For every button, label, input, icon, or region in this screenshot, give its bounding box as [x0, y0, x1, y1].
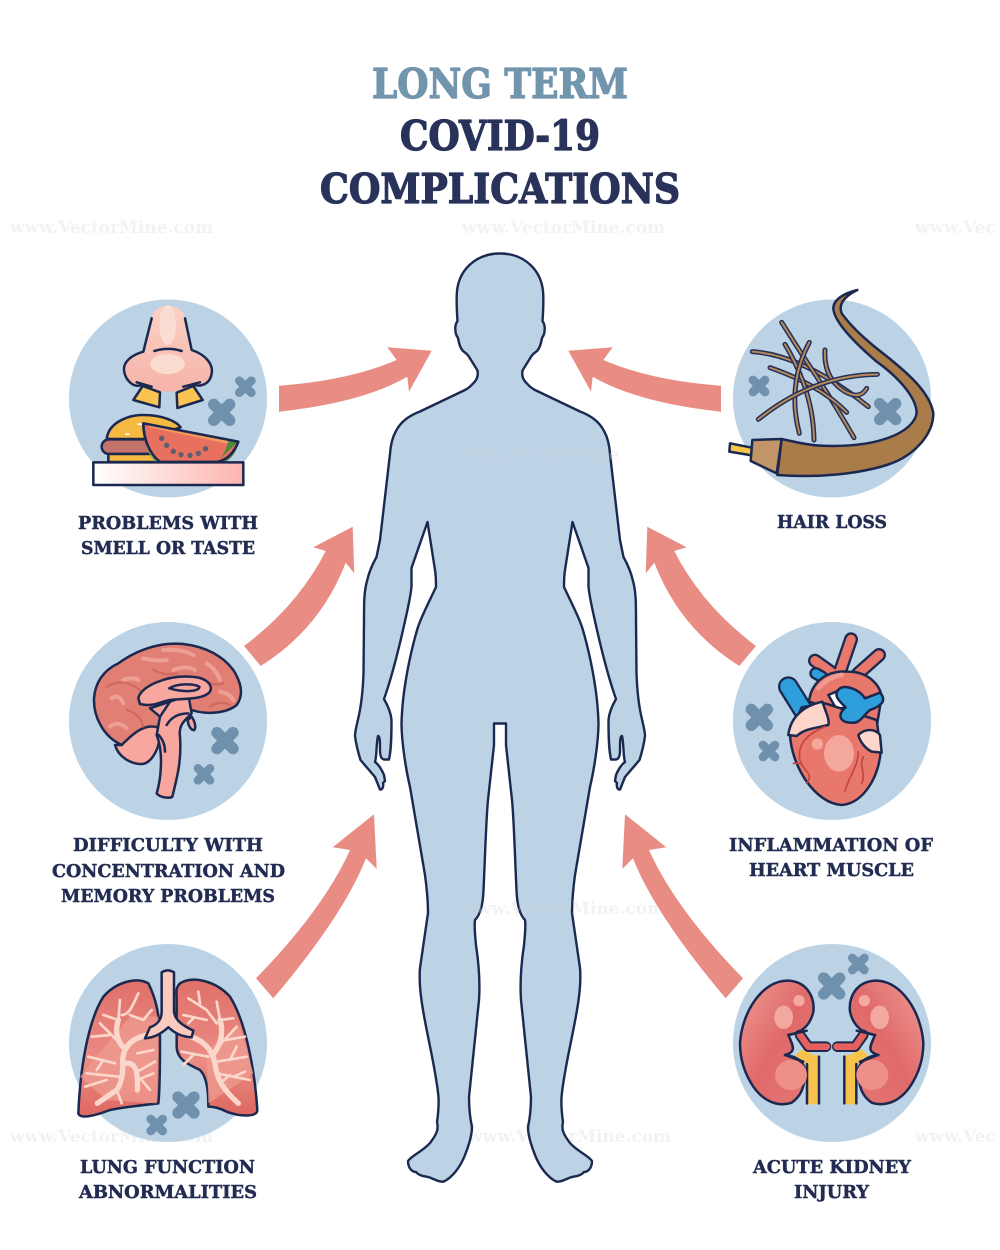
label: problems with smell or taste: [78, 513, 258, 559]
arrow: lungs to body: [256, 814, 377, 998]
label: acute kidney injury: INJURY: [794, 1182, 870, 1203]
circle background: [69, 300, 267, 498]
label: inflammation of heart muscle: HEART MUSCLE: [749, 860, 914, 881]
label: lung function abnormalities: ABNORMALITIES: [78, 1182, 257, 1203]
label: difficulty with concentration: CONCENTRATION AND: [52, 861, 285, 882]
label: inflammation of heart muscle: INFLAMMATION OF: [729, 835, 933, 856]
arrow: kidneys to body: [622, 814, 743, 998]
label: hair loss: HAIR LOSS: [777, 512, 887, 533]
watermark text: www.VectorMine.com: [9, 1127, 213, 1147]
circle background: [733, 944, 931, 1142]
arrow: smell to head: [279, 347, 432, 412]
circle background: [69, 944, 267, 1142]
arrow: brain to body: [244, 527, 354, 666]
label: lung function abnormalities: [78, 1157, 257, 1203]
label: difficulty with concentration: MEMORY PROBLEMS: [61, 886, 275, 907]
label: problems with smell or taste: SMELL OR TASTE: [81, 538, 255, 559]
arrow: heart to body: [646, 527, 756, 666]
panel: smell or taste: [69, 300, 267, 559]
label: inflammation of heart muscle: [729, 835, 933, 881]
label: difficulty with concentration: [52, 835, 285, 907]
title: COMPLICATIONS: [320, 165, 680, 213]
watermark text: www.VectorMine.com: [461, 218, 665, 238]
watermark text: www.Vec: [914, 1127, 996, 1147]
icon: lungs: [78, 970, 257, 1131]
icon: kidneys: [740, 958, 923, 1104]
icon: nose, burger and watermelon: [93, 305, 251, 485]
label: lung function abnormalities: LUNG FUNCTION: [80, 1157, 255, 1178]
label: acute kidney injury: ACUTE KIDNEY: [752, 1157, 912, 1178]
panel: heart inflammation: [729, 622, 933, 881]
icon: hair strands: [729, 290, 933, 476]
circle background: [733, 300, 931, 498]
panel: kidney injury: [733, 944, 931, 1203]
title: [320, 60, 680, 213]
watermark text: www.Vec: [914, 218, 996, 238]
arrow: hair to head: [568, 347, 721, 412]
human body silhouette: www.VectorMine.com: [461, 899, 665, 919]
title: LONG TERM: [372, 60, 628, 108]
icon: heart: [751, 639, 883, 805]
watermark text: [9, 218, 996, 1147]
panel: hair loss: [729, 290, 933, 533]
panel: lung function: [69, 944, 267, 1203]
watermark text: www.VectorMine.com: [9, 218, 213, 238]
watermark text: www.VectorMine.com: [467, 1127, 671, 1147]
human body silhouette: [355, 254, 665, 1182]
panel: concentration and memory: [52, 622, 285, 907]
label: acute kidney injury: [752, 1157, 912, 1203]
circle background: [69, 622, 267, 820]
icon: brain: [94, 644, 241, 798]
label: difficulty with concentration: DIFFICULTY WITH: [73, 835, 263, 856]
human body silhouette: www.VectorMine: [461, 445, 620, 465]
title: COVID-19: [400, 112, 600, 160]
label: problems with smell or taste: PROBLEMS WITH: [78, 513, 258, 534]
circle background: [733, 622, 931, 820]
